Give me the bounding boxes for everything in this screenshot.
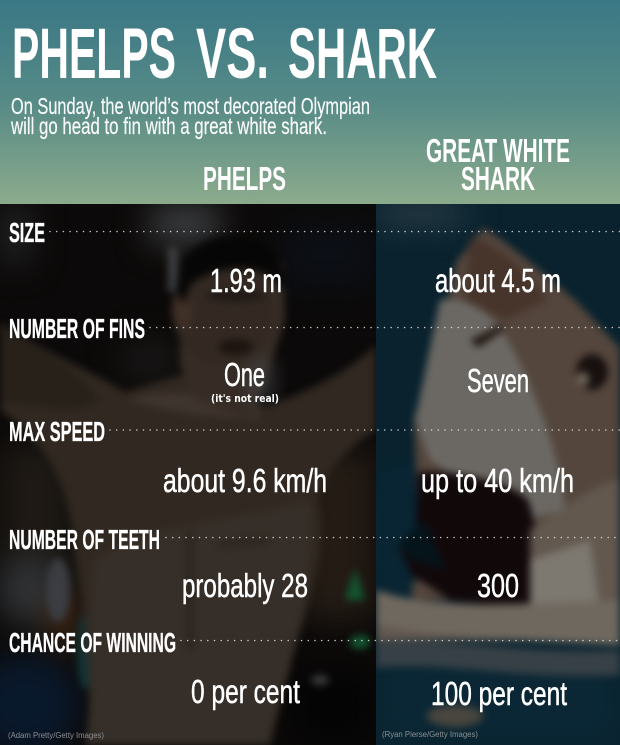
credit: shark photo: (Ryan Pierse/Getty Images)	[382, 730, 478, 739]
intro text: On Sunday, the world’s most decorated Olympian	[11, 93, 370, 119]
title: VS.	[196, 15, 269, 94]
column heading: Phelps: PHELPS	[203, 160, 286, 197]
value: shark teeth: 300	[477, 567, 519, 604]
lower jaw and foam	[376, 480, 620, 640]
value: shark chance: 100 per cent	[431, 675, 567, 712]
shark body	[408, 226, 620, 605]
value: Phelps chance: 0 per cent	[191, 673, 300, 710]
panel: Phelps photo	[0, 204, 376, 745]
value: shark size: about 4.5 m	[435, 262, 561, 299]
value: shark fins: Seven	[467, 362, 529, 399]
title	[12, 15, 437, 94]
row: size: SIZE	[9, 217, 45, 248]
row: number of teeth: NUMBER OF TEETH	[9, 524, 160, 555]
row: chance of winning: CHANCE OF WINNING	[9, 627, 176, 658]
value: Phelps fins: (it's not real)	[211, 393, 279, 405]
neck and face	[177, 271, 288, 396]
header band	[0, 0, 620, 204]
mouth	[398, 472, 536, 610]
water left of the mouth	[377, 518, 417, 602]
hair	[176, 236, 283, 305]
column heading: Great White Shark	[426, 132, 570, 197]
value: Phelps fins: One	[224, 356, 265, 393]
row: max speed: MAX SPEED	[9, 416, 105, 447]
title: SHARK	[288, 15, 437, 94]
value: shark speed: up to 40 km/h	[421, 462, 574, 499]
value: Phelps teeth: probably 28	[182, 567, 308, 604]
arms and torso	[0, 346, 376, 648]
title: PHELPS	[12, 15, 176, 94]
value: Phelps fins	[211, 356, 279, 405]
row: number of fins: NUMBER OF FINS	[9, 313, 145, 344]
value: Phelps speed: about 9.6 km/h	[163, 462, 327, 499]
intro text: will go head to fin with a great white shark.	[10, 113, 327, 139]
credit: Phelps photo: (Adam Pretty/Getty Images)	[8, 731, 104, 740]
intro text	[10, 93, 370, 139]
column heading: Great White Shark: SHARK	[461, 160, 535, 197]
value: Phelps size: 1.93 m	[210, 262, 282, 299]
panel: shark photo	[376, 204, 620, 745]
